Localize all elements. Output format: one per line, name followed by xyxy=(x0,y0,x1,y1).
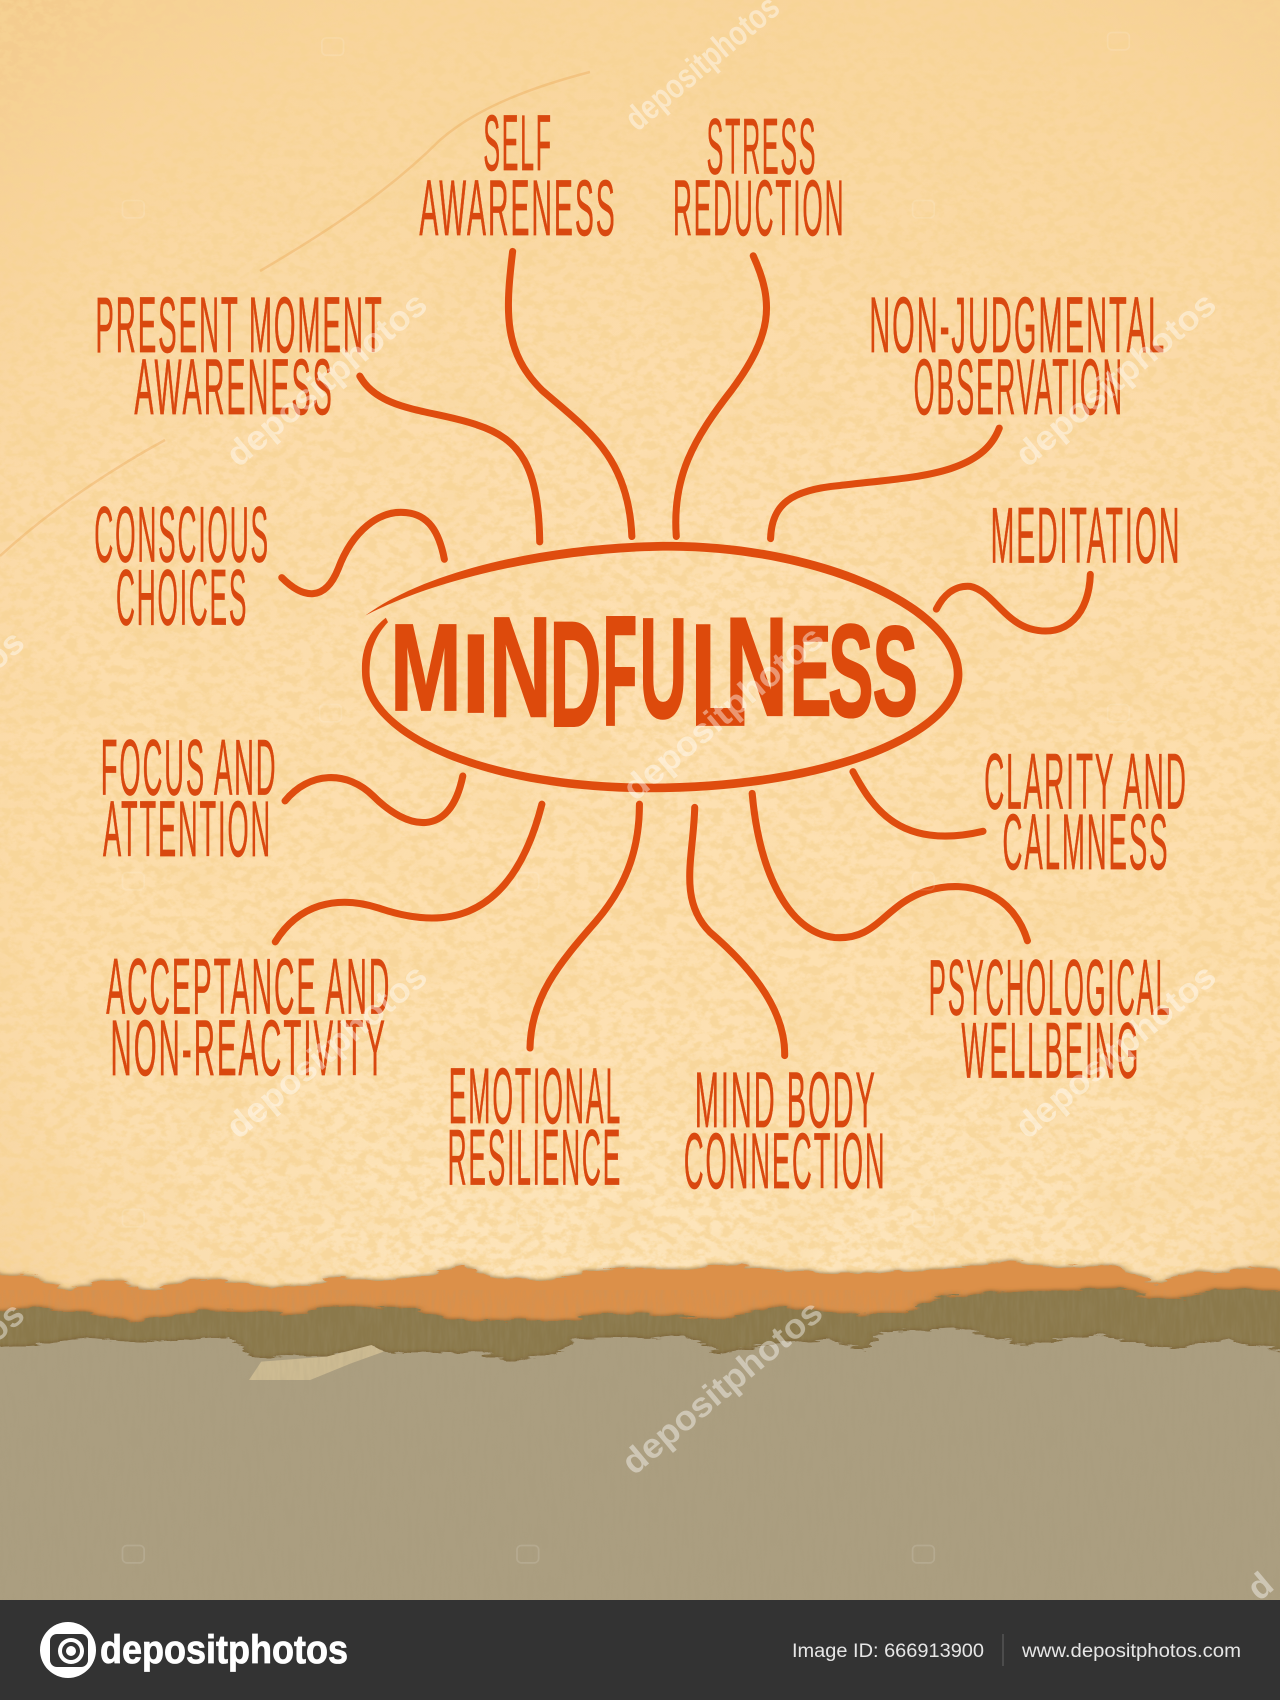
title: MINDFULNESS: E xyxy=(790,599,831,743)
label: mind body connection xyxy=(684,1055,887,1205)
title: MINDFULNESS: N xyxy=(725,587,788,745)
label: self awareness xyxy=(419,98,617,252)
logo wordmark: depositphotos xyxy=(100,1628,348,1672)
concept labels: AWARENESS xyxy=(134,342,334,431)
logo icon: camera in circle xyxy=(40,1622,96,1678)
stock photo watermarks: depositphotos xyxy=(219,957,435,1146)
title: MINDFULNESS: D xyxy=(549,590,602,758)
curve: psychological wellbeing xyxy=(752,793,1027,941)
concept labels: MIND BODY xyxy=(695,1055,877,1144)
label: focus and attention xyxy=(101,722,277,873)
label: non-judgmental observation xyxy=(869,280,1166,431)
torn paper layers xyxy=(0,1262,1280,1640)
title: MINDFULNESS xyxy=(390,584,918,759)
title: MINDFULNESS: L xyxy=(690,594,747,756)
curve: conscious choices xyxy=(282,512,444,594)
stock photo watermarks: depositphotos xyxy=(616,619,831,808)
title: MINDFULNESS: F xyxy=(603,584,637,759)
title: MINDFULNESS: N xyxy=(489,587,552,747)
olive paper layer xyxy=(0,1287,1280,1440)
curve: self awareness xyxy=(508,251,632,536)
title: MINDFULNESS: S xyxy=(872,600,918,743)
concept labels: NON-REACTIVITY xyxy=(111,1003,387,1092)
curve: mind body connection xyxy=(690,807,785,1056)
title: MINDFULNESS: U xyxy=(639,588,687,748)
label: emotional resilience xyxy=(448,1051,622,1202)
central ellipse xyxy=(362,542,962,792)
curve: emotional resilience xyxy=(530,804,639,1048)
label: present moment awareness xyxy=(95,280,384,431)
title: MINDFULNESS: I xyxy=(462,611,490,736)
image id: Image ID: 666913900 xyxy=(792,1641,984,1662)
stock photo watermarks: depositphotos xyxy=(1008,957,1224,1146)
concept labels: RESILIENCE xyxy=(448,1113,622,1202)
curve: clarity and calmness xyxy=(853,772,983,836)
concept labels: REDUCTION xyxy=(673,163,845,252)
concept labels: STRESS xyxy=(707,101,817,190)
concept labels: ATTENTION xyxy=(103,784,272,873)
grey-beige paper layer xyxy=(0,1328,1280,1640)
concept labels: EMOTIONAL xyxy=(449,1051,622,1140)
label: acceptance and non-reactivity xyxy=(106,941,391,1092)
connector curves xyxy=(275,251,1090,1056)
label: psychological wellbeing xyxy=(929,942,1172,1094)
concept labels: CONSCIOUS xyxy=(94,489,270,578)
title: MINDFULNESS: S xyxy=(828,597,874,745)
curve: meditation xyxy=(936,574,1090,631)
orange paper layer xyxy=(0,1262,1280,1407)
concept labels: ACCEPTANCE AND xyxy=(106,941,391,1030)
concept labels: PRESENT MOMENT xyxy=(95,280,384,369)
cream paper background xyxy=(0,0,1280,1320)
footer bar xyxy=(0,1600,1280,1700)
curve: stress reduction xyxy=(676,256,767,536)
concept labels: CHOICES xyxy=(116,552,248,641)
stock photo watermarks: depositphotos xyxy=(219,285,435,474)
website url: www.depositphotos.com xyxy=(1021,1641,1241,1662)
faint camera watermark icons xyxy=(122,33,1129,1563)
concept labels: AWARENESS xyxy=(419,163,617,252)
label: stress reduction xyxy=(673,101,845,252)
stock photo watermarks: depositphotos xyxy=(615,1293,830,1482)
concept labels: FOCUS AND xyxy=(101,722,277,811)
label: clarity and calmness xyxy=(984,737,1188,886)
concept labels xyxy=(94,98,1188,1205)
title: MINDFULNESS: M xyxy=(390,599,462,737)
stock photo watermarks: depositphotos xyxy=(1008,285,1224,474)
label: conscious choices xyxy=(94,489,270,641)
curve: non-judgmental observation xyxy=(771,428,999,539)
concept labels: CONNECTION xyxy=(684,1116,887,1205)
curve: present moment awareness xyxy=(360,376,540,542)
curve: focus and attention xyxy=(285,776,463,823)
stock photo watermarks: d xyxy=(1240,1565,1280,1608)
curve: acceptance and non-reactivity xyxy=(275,804,542,942)
label: self awareness: SELF xyxy=(483,98,553,187)
